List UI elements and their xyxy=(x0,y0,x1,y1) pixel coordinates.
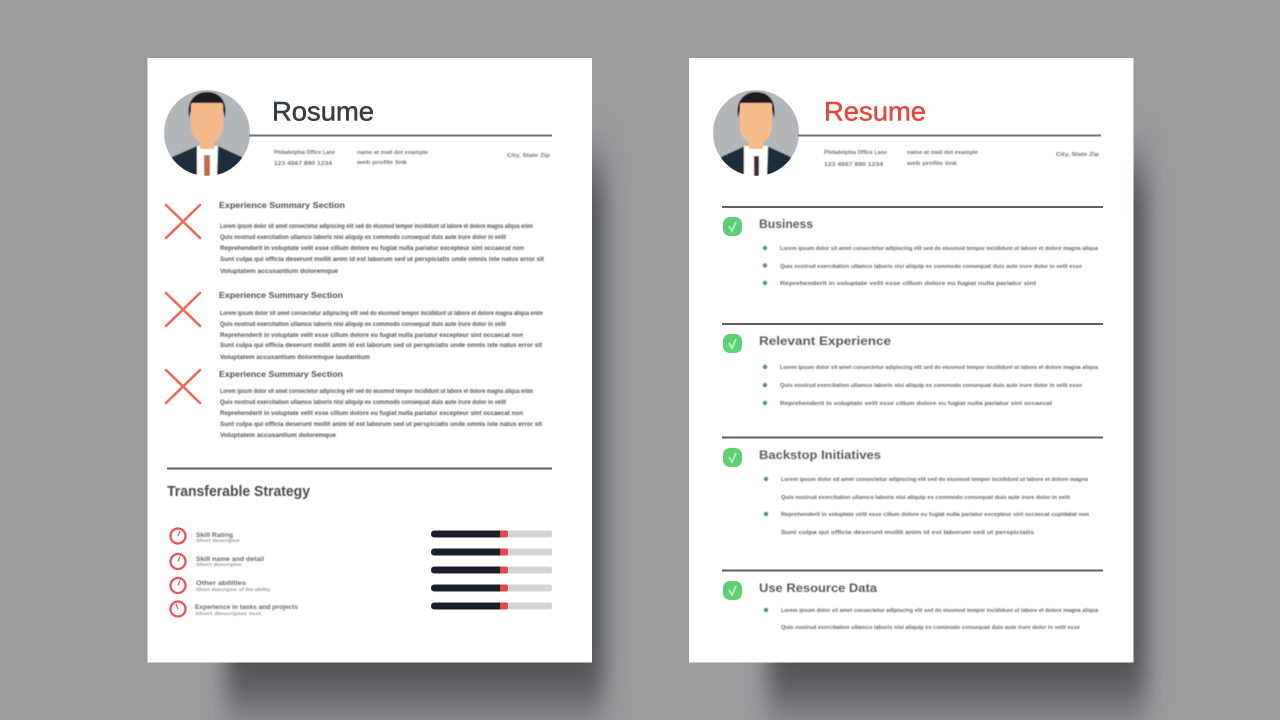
bullets 4: Lorem ipsum dolor sit amet consectetur adipiscing elit sed do eiusmod tempor incididunt ut labore et dolore magna aliqua xyxy=(781,608,1099,614)
section 3 xyxy=(722,436,1103,536)
icon: check 2 xyxy=(723,334,742,353)
skill labels xyxy=(195,532,298,616)
contact details xyxy=(274,150,551,167)
text block: issue 1: Reprehenderit in voluptate velit esse cillum dolore eu fugiat nulla pariatur excepteur sint occaecat non xyxy=(220,245,524,252)
icon: dial 4 xyxy=(170,602,186,616)
contact details: 123 4567 890 1234 xyxy=(824,162,883,168)
skill labels: Short descriptor xyxy=(196,562,242,567)
icon: check 3 xyxy=(723,448,742,467)
text block: issue 3: Quis nostrud exercitation ullamco laboris nisi aliquip ex commodo consequat duis aute irure dolor in velit xyxy=(220,399,507,406)
skill labels: Skill Rating xyxy=(196,532,233,539)
contact details: 123 4567 890 1234 xyxy=(274,161,332,167)
text block: issue 2: Sunt culpa qui officia deserunt mollit anim id est laborum sed ut perspiciatis unde omnis iste natus error sit xyxy=(220,342,543,349)
icon: cross 1 xyxy=(166,205,200,238)
text block: issue 1: Experience Summary Section xyxy=(219,200,345,210)
contact details xyxy=(824,150,1100,168)
icon: dial 3 xyxy=(170,578,186,593)
contact details: web profile link xyxy=(356,160,407,166)
bullets 2: Lorem ipsum dolor sit amet consectetur adipiscing elit sed do eiusmod tempor incididunt ut labore et dolore magna aliqua xyxy=(780,365,1099,371)
section rule xyxy=(167,468,552,470)
contact details: name at mail dot example xyxy=(357,150,428,156)
contact details: web profile link xyxy=(906,161,957,167)
icon: dial 1 xyxy=(170,528,186,544)
header rule xyxy=(249,134,552,136)
icon: cross 2 xyxy=(166,293,200,326)
bullets 3: Sunt culpa qui officia deserunt mollit anim id est laborum sed ut perspiciatis xyxy=(781,530,1034,536)
panel: strong resume xyxy=(689,58,1134,662)
section 1 xyxy=(722,206,1103,287)
card shadow: left xyxy=(226,165,604,705)
contact details: name at mail dot example xyxy=(907,150,978,156)
header rule xyxy=(798,134,1101,136)
icon: dial 2 xyxy=(170,554,186,569)
bullets 1 xyxy=(763,246,1099,287)
title: Rosume: Rosume xyxy=(272,96,374,126)
heading 2: Relevant Experience xyxy=(759,334,891,348)
text block: issue 1: Quis nostrud exercitation ullamco laboris nisi aliquip ex commodo consequat duis aute irure dolor in velit xyxy=(220,234,507,241)
skill labels: Short descriptor text xyxy=(195,611,262,616)
contact details: City, State Zip xyxy=(1056,152,1100,158)
text block: issue 2: Lorem ipsum dolor sit amet consectetur adipiscing elit sed do eiusmod tempor incididunt ut labore et dolore magna aliqua enim xyxy=(220,310,543,317)
avatar: left xyxy=(164,90,250,176)
bullets 1: Reprehenderit in voluptate velit esse cillum dolore eu fugiat nulla pariatur sint xyxy=(780,281,1036,287)
icon: check 1 xyxy=(723,217,742,236)
text block: issue 2: Experience Summary Section xyxy=(219,290,343,300)
bullets 3: Lorem ipsum dolor sit amet consectetur adipiscing elit sed do eiusmod tempor incididunt ut labore et dolore magna xyxy=(781,477,1089,483)
bullets 2: Reprehenderit in voluptate velit esse cillum dolore eu fugiat nulla pariatur sint occaecat xyxy=(780,401,1052,407)
contact details: Philadelphia Office Lane xyxy=(824,150,887,156)
bullets 1: Quis nostrud exercitation ullamco laboris nisi aliquip ex commodo consequat duis aute irure dolor in velit esse xyxy=(780,264,1082,270)
skill labels: Short descriptor xyxy=(196,538,240,543)
text block: issue 2: Quis nostrud exercitation ullamco laboris nisi aliquip ex commodo consequat duis aute irure dolor in velit xyxy=(220,321,507,328)
heading 4: Use Resource Data xyxy=(759,581,877,595)
icon: cross 3 xyxy=(166,370,200,403)
text block: issue 3: Reprehenderit in voluptate velit esse cillum dolore eu fugiat nulla pariatur excepteur sint occaecat non xyxy=(220,410,523,417)
text block: issue 1 xyxy=(219,200,545,275)
bullets 3: Quis nostrud exercitation ullamco laboris nisi aliquip ex commodo consequat duis aute irure dolor in velit xyxy=(781,495,1070,501)
bullets 4 xyxy=(764,608,1099,631)
bullets 2: Quis nostrud exercitation ullamco laboris nisi aliquip ex commodo consequat duis aute irure dolor in velit esse xyxy=(780,383,1082,389)
bullets 4: Quis nostrud exercitation ullamco laboris nisi aliquip ex commodo consequat duis aute irure dolor in velit esse xyxy=(781,625,1080,631)
panel: weak resume xyxy=(148,58,592,662)
heading 3: Backstop Initiatives xyxy=(759,448,881,462)
bullets 3 xyxy=(764,477,1090,536)
skill labels: Experience in tasks and projects xyxy=(195,604,298,611)
title: Resume: Resume xyxy=(824,96,926,126)
section 2 xyxy=(722,323,1103,407)
avatar: right xyxy=(713,90,799,176)
bullets 1: Lorem ipsum dolor sit amet consectetur adipiscing elit sed do eiusmod tempor incididunt ut labore et dolore magna aliqua xyxy=(780,246,1099,252)
contact details: Philadelphia Office Lane xyxy=(274,150,335,156)
icon: check 4 xyxy=(723,581,742,600)
text block: issue 3: Sunt culpa qui officia deserunt mollit anim id est laborum sed ut perspiciatis unde omnis iste natus error sit xyxy=(220,421,543,428)
text block: issue 1: Sunt culpa qui officia deserunt mollit anim id est laborum sed ut perspiciatis unde omnis iste natus error sit xyxy=(220,256,545,263)
text block: issue 2: Voluptatem accusantium doloremque laudantium xyxy=(220,354,370,361)
skill list xyxy=(170,528,298,616)
text block: issue 3: Experience Summary Section xyxy=(219,369,343,379)
card shadow: right xyxy=(768,165,1146,705)
bullets 2 xyxy=(763,365,1099,407)
skill labels: Other abilities xyxy=(196,580,247,587)
text block: issue 3: Lorem ipsum dolor sit amet consectetur adipiscing elit sed do eiusmod tempor incididunt ut labore et dolore magna aliqua enim xyxy=(220,388,533,395)
text block: issue 2 xyxy=(219,290,543,361)
bar chart: skill levels xyxy=(431,530,552,610)
heading: skills: Transferable Strategy xyxy=(167,484,310,500)
contact details: City, State Zip xyxy=(507,153,551,159)
heading 1: Business xyxy=(759,217,813,231)
skill labels: Short descriptor of the ability xyxy=(196,587,271,592)
text block: issue 1: Lorem ipsum dolor sit amet consectetur adipiscing elit sed do eiusmod tempor incididunt ut labore et dolore magna aliqua enim xyxy=(220,223,533,230)
text block: issue 2: Reprehenderit in voluptate velit esse cillum dolore eu fugiat nulla pariatur excepteur sint occaecat non xyxy=(220,332,523,339)
text block: issue 1: Voluptatem accusantium doloremque xyxy=(220,268,338,275)
text block: issue 3: Voluptatem accusantium doloremque xyxy=(220,432,336,439)
section 4 xyxy=(722,570,1103,631)
bullets 3: Reprehenderit in voluptate velit esse cillum dolore eu fugiat nulla pariatur excepteur sint occaecat cupidatat non xyxy=(781,512,1090,518)
text block: issue 3 xyxy=(219,369,543,439)
skill labels: Skill name and detail xyxy=(196,556,264,563)
